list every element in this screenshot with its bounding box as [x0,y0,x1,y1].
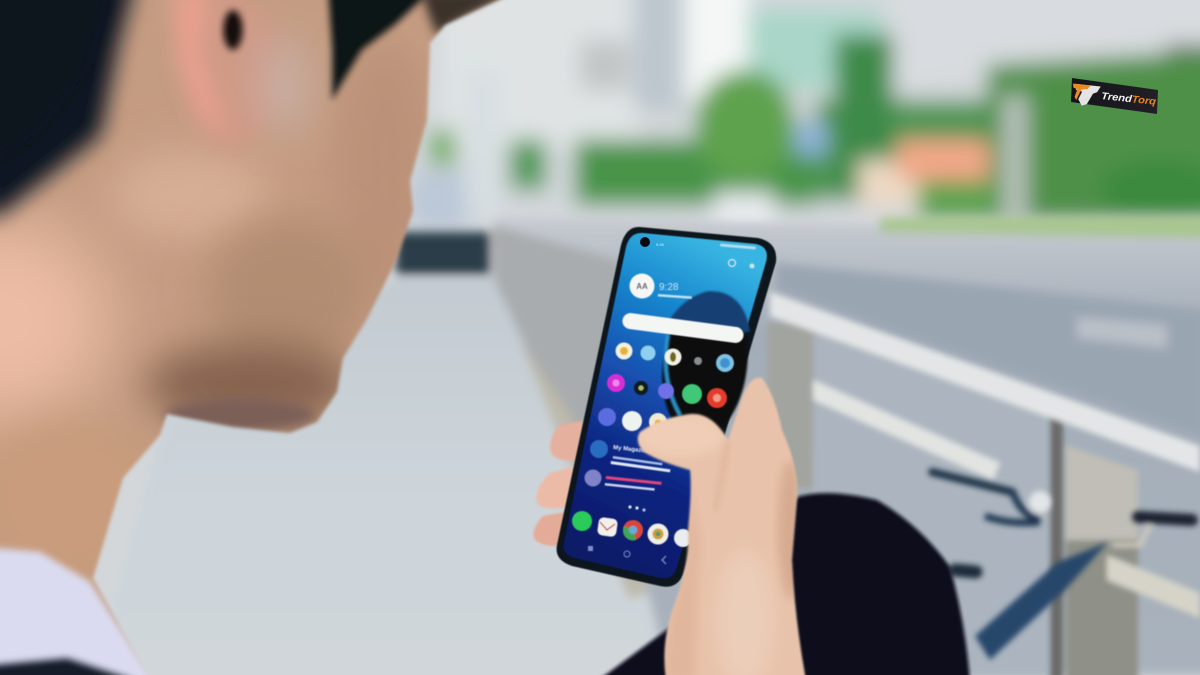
jaw shadow [145,343,355,427]
street sign [795,122,827,156]
logo: TrendTorq [1071,78,1158,114]
avatar widget [630,274,692,299]
hand holding phone [636,376,807,675]
status and search icons [720,243,756,268]
person head and neck [0,0,530,675]
navigation buttons [588,546,666,564]
hair [0,0,135,215]
search bar [621,312,745,344]
smartphone [557,227,776,587]
parked cars [714,192,774,230]
app icons [584,342,734,486]
bicycle [932,472,1192,660]
orange roof [858,160,918,206]
dark knee [592,493,970,675]
dark car [396,232,490,275]
phone body [557,227,776,587]
status bar text: 9:28 [656,242,665,247]
dock icons [572,511,692,547]
avatar widget: 9:28 [659,282,679,293]
lower gray field behind rail [810,330,1050,675]
phone screen [563,233,767,578]
logo mark [1071,84,1101,107]
road [495,218,1200,675]
camera hole [640,237,650,247]
railing posts [767,323,813,488]
shirt collar [0,547,160,675]
notification text [605,445,670,512]
glasses [435,48,447,66]
ear [208,0,262,135]
logo wordmark: TrendTorq [1101,91,1157,108]
railing bars [770,292,1200,472]
trees [430,130,455,166]
fingers behind phone [534,420,590,546]
skin base [0,0,530,675]
avatar widget: AA [636,282,648,291]
concrete barrier [492,225,625,480]
logo plate [1071,78,1158,114]
sidewalk [90,278,670,675]
notification text: My Magazine [613,445,651,455]
wallpaper orb [654,286,756,444]
sky and buildings [440,0,640,150]
